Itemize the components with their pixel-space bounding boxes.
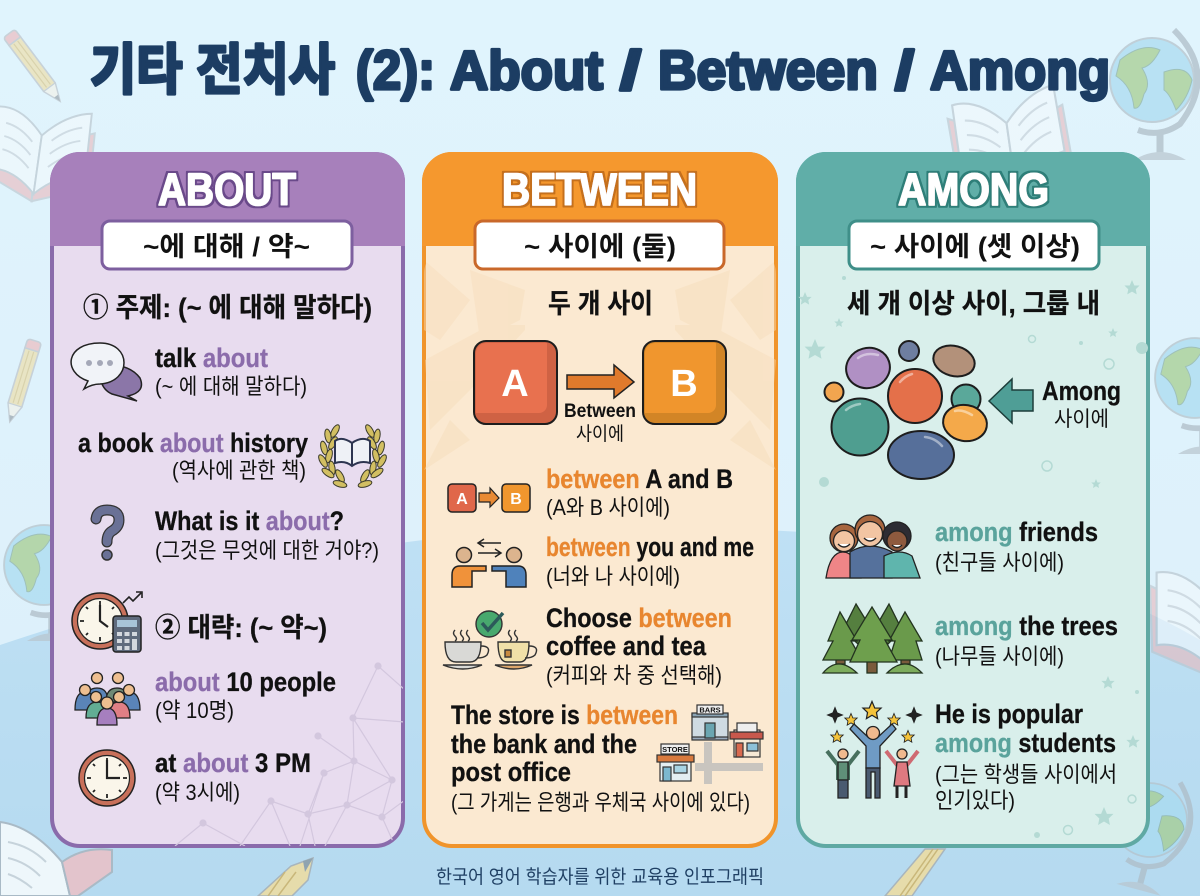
- example: between you and me: (너와 나 사이에): [546, 564, 680, 589]
- icon: clock and calculator: [72, 592, 142, 652]
- icon: question mark: [96, 510, 119, 560]
- example: popular among students: He is popular: [935, 699, 1083, 729]
- between subtitle pill: [475, 221, 724, 269]
- example: between A and B: between A and B: [546, 464, 733, 494]
- example: choose between: coffee and tea: [546, 631, 707, 661]
- example: the store is between: post office: [451, 757, 571, 787]
- arrow label: [564, 401, 636, 445]
- about subtitle pill: [102, 221, 352, 269]
- icon: book with laurel: [317, 423, 388, 489]
- example: popular among students: 인기있다): [935, 788, 1015, 813]
- facet pattern: [424, 260, 776, 470]
- example: a book about history: (역사에 관한 책): [172, 458, 306, 483]
- example: the store is between: [451, 700, 750, 815]
- example: popular among students: (그는 학생들 사이에서: [935, 762, 1117, 787]
- icon: friends: [826, 515, 920, 578]
- example: at about 3 PM: at about 3 PM: [155, 748, 311, 778]
- network pattern: [175, 663, 405, 846]
- about subtitle pill: ~에 대해 / 약~: [143, 232, 310, 262]
- diagram: A to B: [474, 341, 726, 445]
- example: among friends: [935, 517, 1098, 575]
- icon: group of people: [75, 672, 140, 725]
- arrow label: 사이에: [1054, 408, 1109, 431]
- arrow: points to group: [989, 379, 1033, 423]
- example: about 10 people: about 10 people: [155, 667, 336, 697]
- icon: post office: [730, 723, 763, 757]
- example: between A and B: [546, 464, 733, 520]
- section: between two: 두 개 사이: [548, 289, 653, 319]
- icon: town map: [657, 705, 763, 784]
- example: what is it about: What is it about?: [155, 506, 344, 536]
- title: (2):: [356, 39, 435, 101]
- example: choose between: (커피와 차 중 선택해): [546, 663, 722, 688]
- footer caption: 한국어 영어 학습자를 위한 교육용 인포그래픽: [436, 866, 764, 888]
- example: among the trees: [935, 611, 1118, 669]
- among subtitle pill: [849, 221, 1099, 269]
- example: popular among students: [935, 699, 1117, 813]
- example: popular among students: among students: [935, 728, 1116, 758]
- arrow label: [1042, 376, 1121, 431]
- star pattern: [798, 276, 1148, 838]
- example: what is it about: (그것은 무엇에 대한 거야?): [155, 538, 379, 563]
- example: choose between: Choose between: [546, 603, 732, 633]
- between heading: BETWEEN: [502, 164, 697, 215]
- example: what is it about: [155, 506, 379, 563]
- icon: you and me: [452, 539, 526, 587]
- icon: clock: [79, 750, 135, 806]
- panel: among: [796, 152, 1150, 846]
- title: 기타 전치사: [90, 39, 335, 101]
- arrow label: Among: [1042, 376, 1121, 406]
- example: between you and me: between you and me: [546, 532, 754, 562]
- icon: speech bubbles: [71, 343, 142, 401]
- box A: A: [501, 363, 529, 405]
- panel: about: [50, 152, 405, 846]
- icon: small A to B: [448, 484, 530, 512]
- icon: store: STORE: [662, 745, 688, 754]
- section: approximate: ② 대략: (~ 약~): [155, 613, 327, 643]
- arrow: [567, 365, 634, 398]
- example: talk about: [155, 343, 307, 399]
- example: between you and me: [546, 532, 754, 589]
- title: Between: [658, 39, 878, 101]
- example: at about 3 PM: (약 3시에): [155, 780, 240, 805]
- icon: trees: [823, 604, 922, 673]
- example: about 10 people: (약 10명): [155, 698, 234, 723]
- icon: small A to B: B: [510, 491, 522, 508]
- example: among the trees: among the trees: [935, 611, 1118, 641]
- example: talk about: (~ 에 대해 말하다): [155, 374, 307, 399]
- title: Among: [930, 39, 1110, 101]
- panel: between: [422, 152, 778, 846]
- example: among friends: (친구들 사이에): [935, 550, 1064, 575]
- title: /: [620, 39, 641, 101]
- example: choose between: [546, 603, 732, 688]
- about heading: ABOUT: [158, 164, 296, 215]
- example: talk about: talk about: [155, 343, 268, 373]
- diagram: group of circles: [824, 341, 990, 479]
- example: a book about history: [78, 428, 308, 483]
- example: the store is between: the bank and the: [451, 729, 637, 759]
- box B: [643, 341, 726, 424]
- example: about 10 people: [155, 667, 336, 723]
- example: at about 3 PM: [155, 748, 311, 805]
- example: a book about history: a book about history: [78, 428, 308, 458]
- title: About: [450, 39, 603, 101]
- title: /: [895, 39, 914, 101]
- example: among friends: among friends: [935, 517, 1098, 547]
- title: [90, 39, 1110, 101]
- box B: B: [670, 363, 698, 405]
- section: three or more: 세 개 이상 사이, 그룹 내: [847, 289, 1100, 319]
- section: topic: ① 주제: (~ 에 대해 말하다): [83, 293, 372, 323]
- icon: coffee and tea: [443, 611, 537, 669]
- example: the store is between: The store is between: [451, 700, 678, 730]
- arrow label: 사이에: [576, 423, 624, 445]
- among heading: AMONG: [898, 164, 1049, 215]
- box A: [474, 341, 557, 424]
- example: between A and B: (A와 B 사이에): [546, 495, 670, 520]
- example: the store is between: (그 가게는 은행과 우체국 사이에 있다): [451, 790, 750, 815]
- example: among the trees: (나무들 사이에): [935, 644, 1064, 669]
- icon: bank: BARS: [699, 706, 721, 714]
- among subtitle pill: ~ 사이에 (셋 이상): [870, 232, 1080, 262]
- between subtitle pill: ~ 사이에 (둘): [524, 232, 676, 262]
- arrow label: Between: [564, 401, 636, 422]
- icon: celebrating people with stars: [827, 702, 921, 798]
- icon: small A to B: A: [456, 491, 468, 508]
